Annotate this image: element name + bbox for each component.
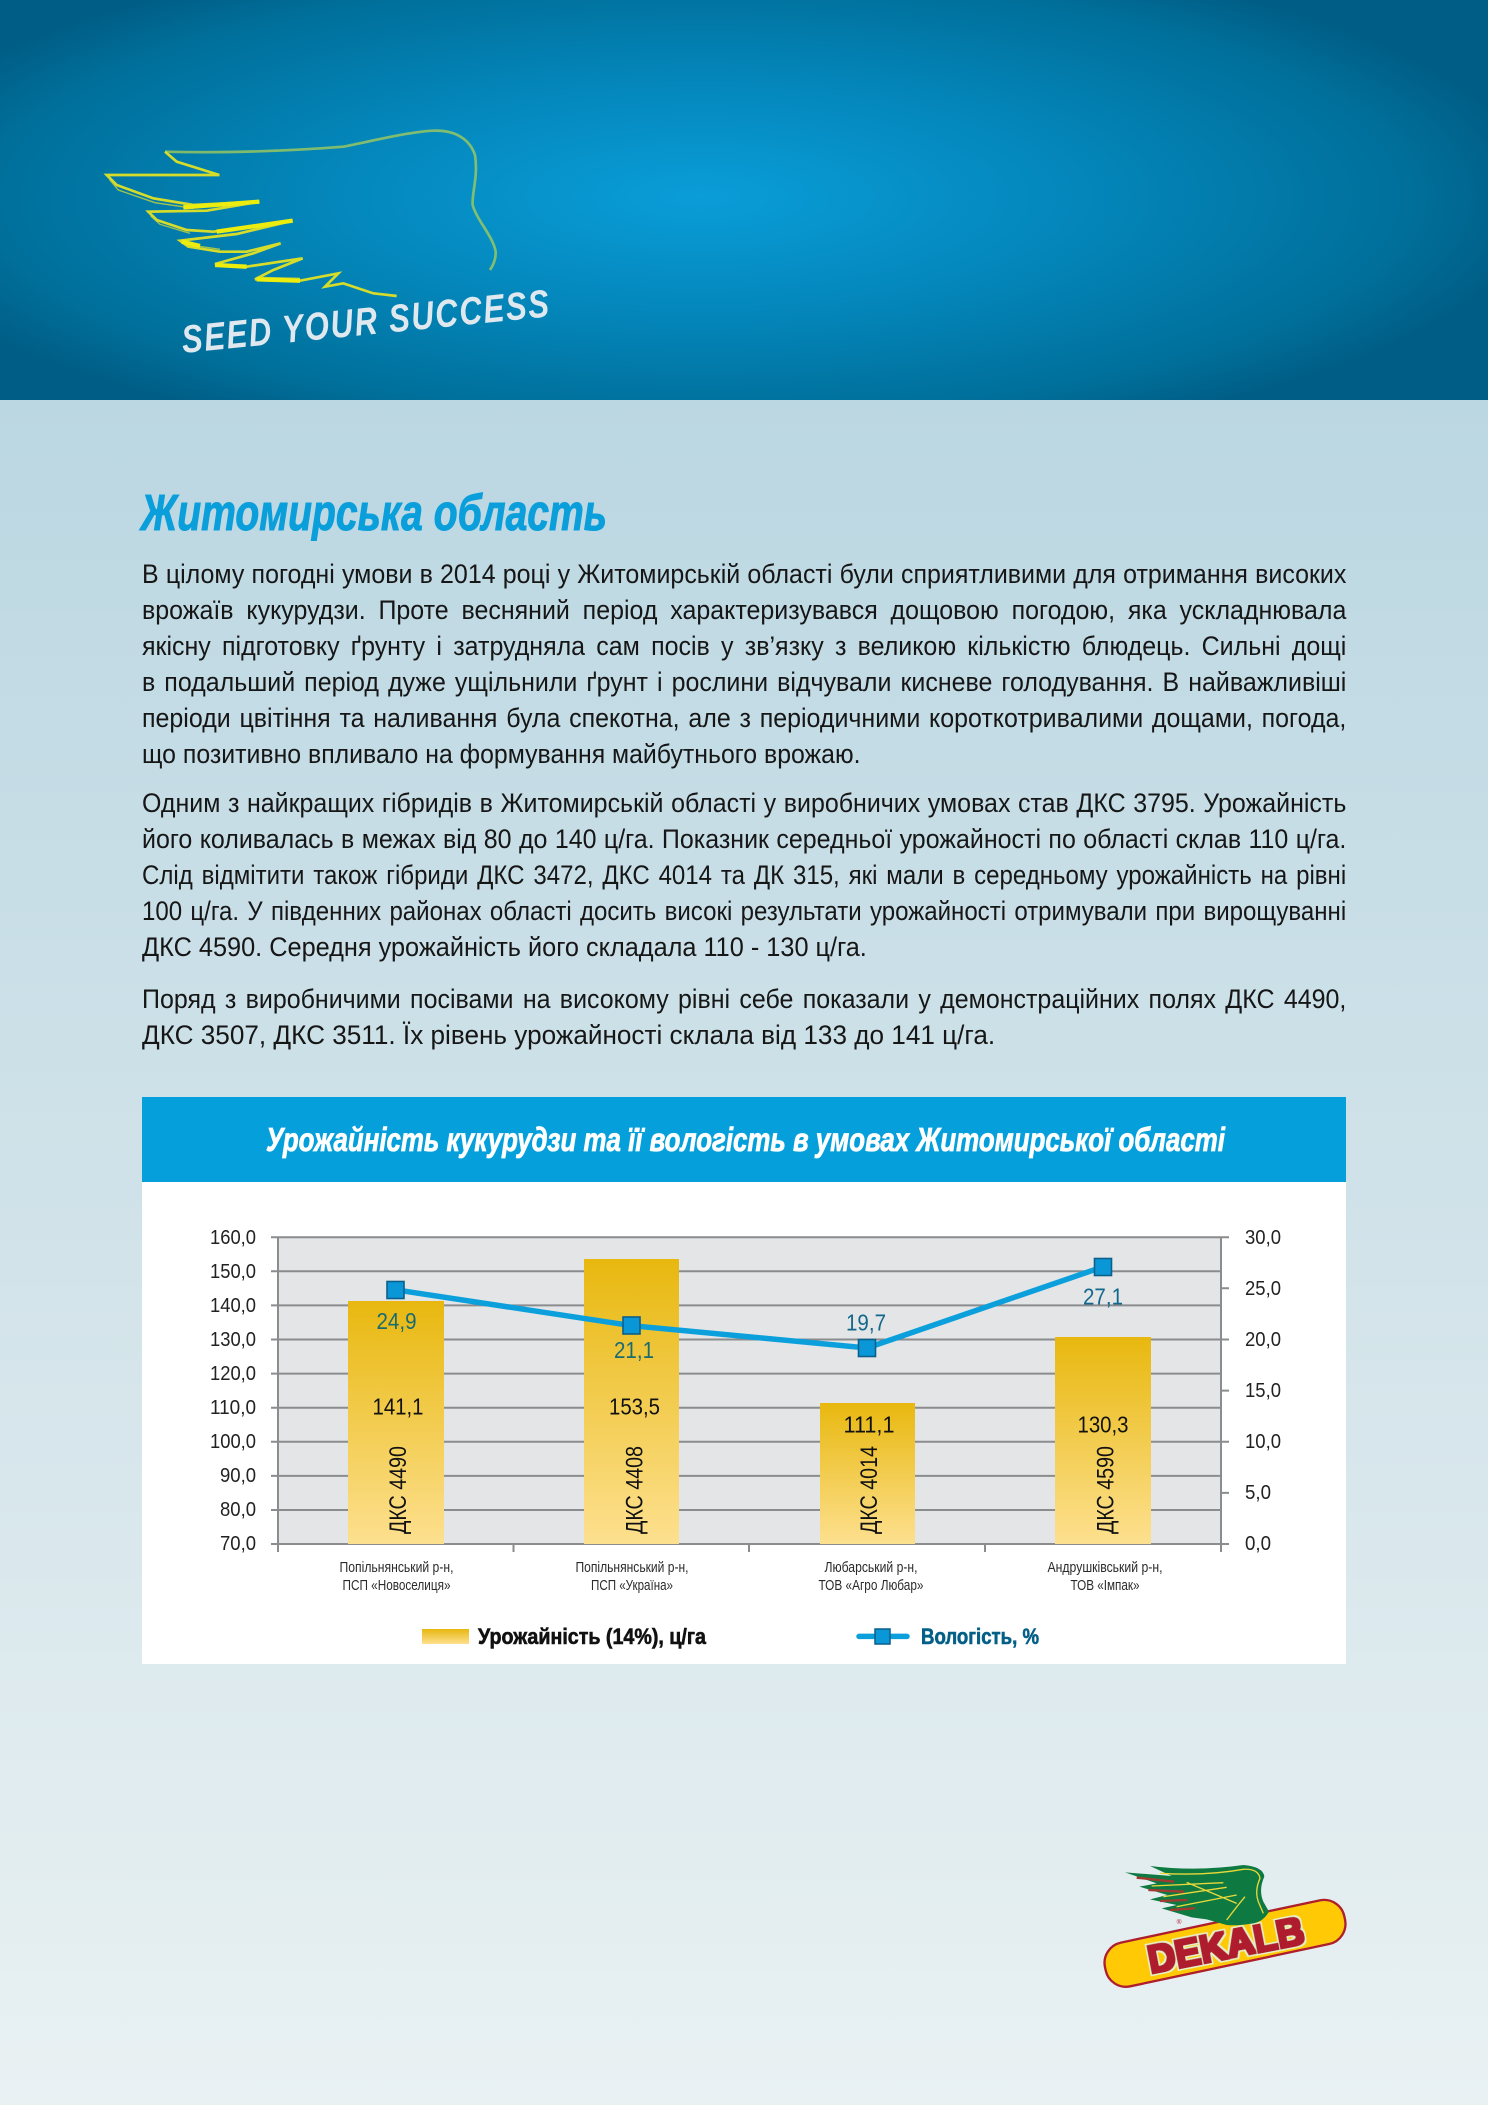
hybrid names: ДКС 4590 — [1092, 1446, 1120, 1534]
legend: moisture — [859, 1624, 1039, 1649]
icon: yellow wing — [107, 131, 496, 296]
left axis labels: 100,0 — [210, 1431, 256, 1453]
chart title band — [142, 1097, 1346, 1182]
left axis labels: 130,0 — [210, 1329, 256, 1351]
left axis labels: 140,0 — [210, 1295, 256, 1317]
legend: yield: Урожайність (14%), ц/га — [478, 1624, 707, 1649]
category labels: ТОВ «Агро Любар» — [818, 1577, 924, 1594]
moisture values: 19,7 — [846, 1310, 886, 1336]
logo: Dekalb — [1103, 1865, 1347, 1988]
hybrid names: ДКС 4490 — [385, 1446, 412, 1534]
moisture values — [376, 1284, 1123, 1363]
category labels: Любарський р-н, — [824, 1559, 918, 1576]
logo pill — [1101, 1896, 1349, 1991]
text block: paragraph 3: Поряд з виробничими посівами на високому рівні себе показали у демонстраційних полях ДКС 4490, — [142, 984, 1346, 1014]
left axis labels: 150,0 — [210, 1261, 256, 1283]
logo wing — [1125, 1865, 1269, 1925]
hybrid names: ДКС 4408 — [622, 1446, 648, 1534]
left axis labels: 80,0 — [220, 1499, 256, 1521]
left axis labels: 90,0 — [220, 1465, 256, 1487]
right axis labels: 30,0 — [1245, 1227, 1281, 1249]
text block: paragraph 1: В цілому погодні умови в 2014 році у Житомирській області були сприятливими для отримання високих — [142, 559, 1346, 589]
yield values: 111,1 — [844, 1412, 894, 1438]
hybrid names — [385, 1446, 1120, 1534]
text block: paragraph 2: його коливалась в межах від 80 до 140 ц/га. Показник середньої урожайності по області склав 110 ц/га. — [142, 824, 1346, 854]
category labels: Попільнянський р-н, — [576, 1559, 688, 1576]
text block: paragraph 1 — [142, 559, 1346, 769]
right axis labels: 10,0 — [1245, 1431, 1281, 1453]
moisture values: 21,1 — [614, 1337, 654, 1363]
moisture line — [387, 1258, 1112, 1356]
category labels: ПСП «Україна» — [591, 1577, 673, 1594]
logo registered mark: ® — [1177, 1918, 1182, 1926]
category labels — [340, 1559, 1162, 1594]
yield values: 153,5 — [609, 1394, 660, 1420]
slogan: SEED YOUR SUCCESS — [180, 282, 551, 362]
legend: moisture: Вологість, % — [921, 1624, 1039, 1649]
bars: yield — [348, 1259, 1151, 1544]
right axis labels: 0,0 — [1245, 1533, 1271, 1555]
panel: yield and moisture chart — [142, 1097, 1346, 1664]
left axis labels: 160,0 — [210, 1227, 256, 1249]
header banner — [0, 0, 1488, 400]
text block: paragraph 3 — [142, 984, 1346, 1050]
text block: paragraph 1: в подальший період дуже ущільнили ґрунт і рослини відчували кисневе голодування. В найважливіші — [142, 667, 1346, 697]
right axis labels: 20,0 — [1245, 1329, 1281, 1351]
category labels: ПСП «Новоселиця» — [342, 1577, 450, 1594]
text block: paragraph 2 — [142, 788, 1346, 962]
category labels: Попільнянський р-н, — [340, 1559, 454, 1576]
right axis labels: 15,0 — [1245, 1380, 1281, 1402]
yield values: 141,1 — [372, 1394, 424, 1420]
text block: paragraph 3: ДКС 3507, ДКС 3511. Їх рівень урожайності склала від 133 до 141 ц/га. — [142, 1020, 995, 1050]
text block: paragraph 1: врожаїв кукурудзи. Проте весняний період характеризувався дощовою погодою, яка ускладнювала — [142, 595, 1346, 625]
text block: paragraph 2: Слід відмітити також гібриди ДКС 3472, ДКС 4014 та ДК 315, які мали в середньому урожайність на рівні — [142, 860, 1346, 890]
right axis labels: 25,0 — [1245, 1278, 1281, 1300]
category labels: ТОВ «Імпак» — [1070, 1577, 1140, 1594]
yield values — [372, 1394, 1128, 1438]
text block: paragraph 2: ДКС 4590. Середня урожайність його складала 110 - 130 ц/га. — [142, 932, 867, 962]
right axis labels — [1245, 1227, 1281, 1555]
left axis labels: 70,0 — [220, 1533, 256, 1555]
text block: paragraph 1: періоди цвітіння та наливання була спекотна, але з періодичними короткотривалими дощами, погода, — [142, 703, 1346, 733]
text block: paragraph 1: що позитивно впливало на формування майбутнього врожаю. — [142, 739, 861, 769]
right axis labels: 5,0 — [1245, 1482, 1271, 1504]
moisture values: 24,9 — [376, 1308, 416, 1334]
plot background — [278, 1237, 1221, 1544]
left axis labels: 110,0 — [210, 1397, 256, 1419]
text block: paragraph 1: якісну підготовку ґрунту і затрудняла сам посів у зв’язку з великою кількістю блюдець. Сильні дощі — [142, 631, 1346, 661]
text block: paragraph 2: 100 ц/га. У південних районах області досить високі результати урожайності отримували при вирощуванні — [142, 896, 1346, 926]
hybrid names: ДКС 4014 — [856, 1446, 883, 1534]
category labels: Андрушківський р-н, — [1048, 1559, 1162, 1576]
moisture values: 27,1 — [1083, 1284, 1123, 1310]
left axis labels: 120,0 — [210, 1363, 256, 1385]
logo wordmark: DEKALB — [1144, 1910, 1308, 1982]
yield values: 130,3 — [1078, 1412, 1128, 1438]
text block: paragraph 2: Одним з найкращих гібридів в Житомирській області у виробничих умовах став ДКС 3795. Урожайність — [142, 788, 1346, 818]
left axis labels — [210, 1227, 256, 1555]
